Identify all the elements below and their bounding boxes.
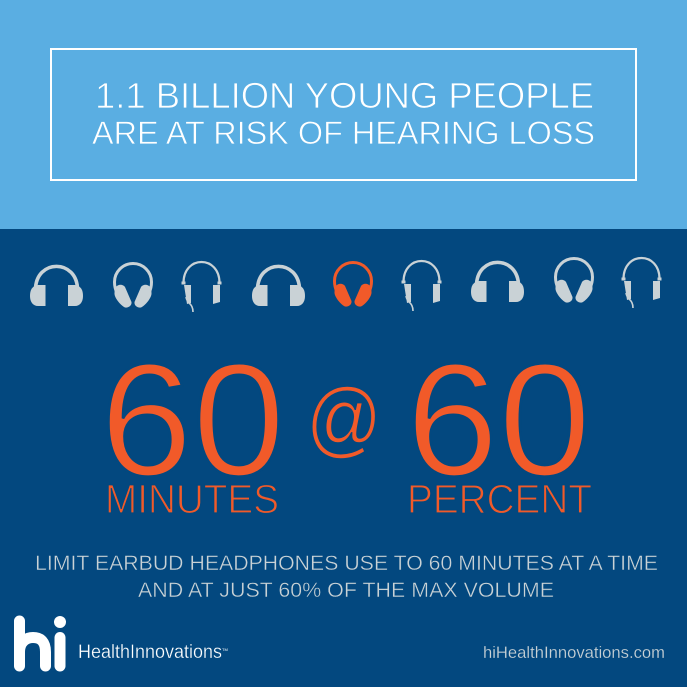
icon: headphones 6: [402, 261, 442, 311]
top light blue panel: [0, 0, 687, 229]
icon: headphones 3: [182, 262, 222, 312]
HealthInnovations logo: [20, 616, 228, 672]
at symbol: @: [306, 371, 382, 465]
bottom navy panel: [0, 229, 687, 687]
label percent: PERCENT: [407, 476, 592, 522]
icon: headphones 7: [471, 262, 524, 302]
advice line 2: AND AT JUST 60% OF THE MAX VOLUME: [138, 579, 554, 602]
icon: headphones 9: [622, 258, 662, 308]
big stat: 60 minutes: [100, 330, 285, 522]
advice text: [35, 552, 658, 602]
logo wordmark: HealthInnovations: [78, 642, 222, 663]
title line 1: 1.1 BILLION YOUNG PEOPLE: [95, 75, 594, 116]
icon: headphones 2: [114, 264, 152, 308]
number 60: 60: [100, 330, 285, 509]
icon: headphones 5 highlighted orange: [334, 262, 372, 307]
advice line 1: LIMIT EARBUD HEADPHONES USE TO 60 MINUTES AT A TIME: [35, 552, 658, 575]
logo mark: hi: [20, 616, 66, 672]
icon: headphones 8: [555, 258, 593, 303]
row of headphone icons: [30, 258, 662, 312]
label minutes: MINUTES: [105, 476, 279, 522]
icon: headphones 1: [30, 266, 83, 306]
website url: hiHealthInnovations.com: [483, 643, 665, 662]
number 60: 60: [406, 330, 591, 509]
title line 2: ARE AT RISK OF HEARING LOSS: [92, 115, 595, 151]
icon: headphones 4: [252, 266, 305, 306]
big stat: 60 percent: [406, 330, 592, 522]
title box: [51, 49, 636, 180]
trademark mark: TM: [222, 647, 228, 652]
